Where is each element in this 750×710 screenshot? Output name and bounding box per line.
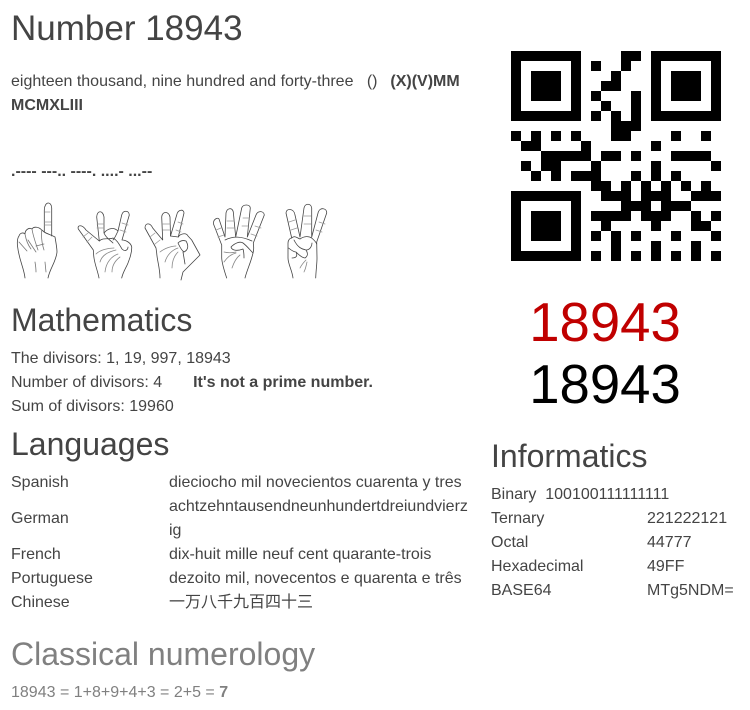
- informatics table: Binary 100100111111111: [491, 486, 669, 503]
- languages table: Portuguese: [11, 570, 93, 587]
- informatics table: Hexadecimal: [491, 558, 583, 575]
- QR code: [511, 51, 721, 261]
- number in red: 18943: [529, 292, 681, 353]
- divisors text block: [11, 350, 373, 415]
- languages table: dix-huit mille neuf cent quarante-trois: [169, 546, 431, 563]
- informatics table: 221222121: [647, 510, 727, 527]
- languages table: dieciocho mil novecientos cuarenta y tres: [169, 474, 462, 491]
- heading: informatics: Informatics: [491, 438, 647, 474]
- informatics table: BASE64: [491, 582, 551, 599]
- languages table: French: [11, 546, 61, 563]
- informatics table: [491, 486, 734, 599]
- languages table: 一万八千九百四十三: [169, 594, 313, 611]
- number name in words and Roman numeral: MCMXLIII: [11, 97, 83, 114]
- informatics table: 49FF: [647, 558, 684, 575]
- divisors text block: Number of divisors: 4 It's not a prime number.: [11, 374, 373, 391]
- heading: languages: Languages: [11, 426, 169, 462]
- informatics table: 44777: [647, 534, 692, 551]
- icon: hand sign 9: [145, 210, 200, 280]
- languages table: German: [11, 510, 69, 527]
- heading: mathematics: Mathematics: [11, 302, 192, 338]
- numerology formula: 18943 = 1+8+9+4+3 = 2+5 = 7: [11, 684, 228, 701]
- informatics table: MTg5NDM=: [647, 582, 734, 599]
- divisors text block: The divisors: 1, 19, 997, 18943: [11, 350, 231, 367]
- number name in words and Roman numeral: [11, 73, 460, 114]
- languages table: dezoito mil, novecentos e quarenta e três: [169, 570, 462, 587]
- divisors text block: Sum of divisors: 19960: [11, 398, 174, 415]
- heading: classical numerology: Classical numerology: [11, 636, 315, 672]
- languages table: [11, 474, 468, 611]
- languages table: Spanish: [11, 474, 69, 491]
- informatics table: Ternary: [491, 510, 544, 527]
- languages table: Chinese: [11, 594, 70, 611]
- informatics table: Octal: [491, 534, 528, 551]
- icon: hand sign 4: [213, 205, 264, 278]
- languages table: achtzehntausendneunhundertdreiundvierz: [169, 498, 468, 515]
- morse code: .---- ---.. ----. ....- ...--: [11, 163, 152, 180]
- sign language hands: [16, 202, 328, 280]
- title: Number 18943: [11, 9, 243, 48]
- number name in words and Roman numeral: eighteen thousand, nine hundred and forty-three () (X)(V)MM: [11, 73, 460, 90]
- icon: hand sign 3: [286, 204, 327, 278]
- languages table: ig: [169, 522, 181, 539]
- icon: hand sign 1: [17, 203, 57, 278]
- number in black: 18943: [529, 354, 681, 415]
- icon: hand sign 8: [78, 211, 132, 278]
